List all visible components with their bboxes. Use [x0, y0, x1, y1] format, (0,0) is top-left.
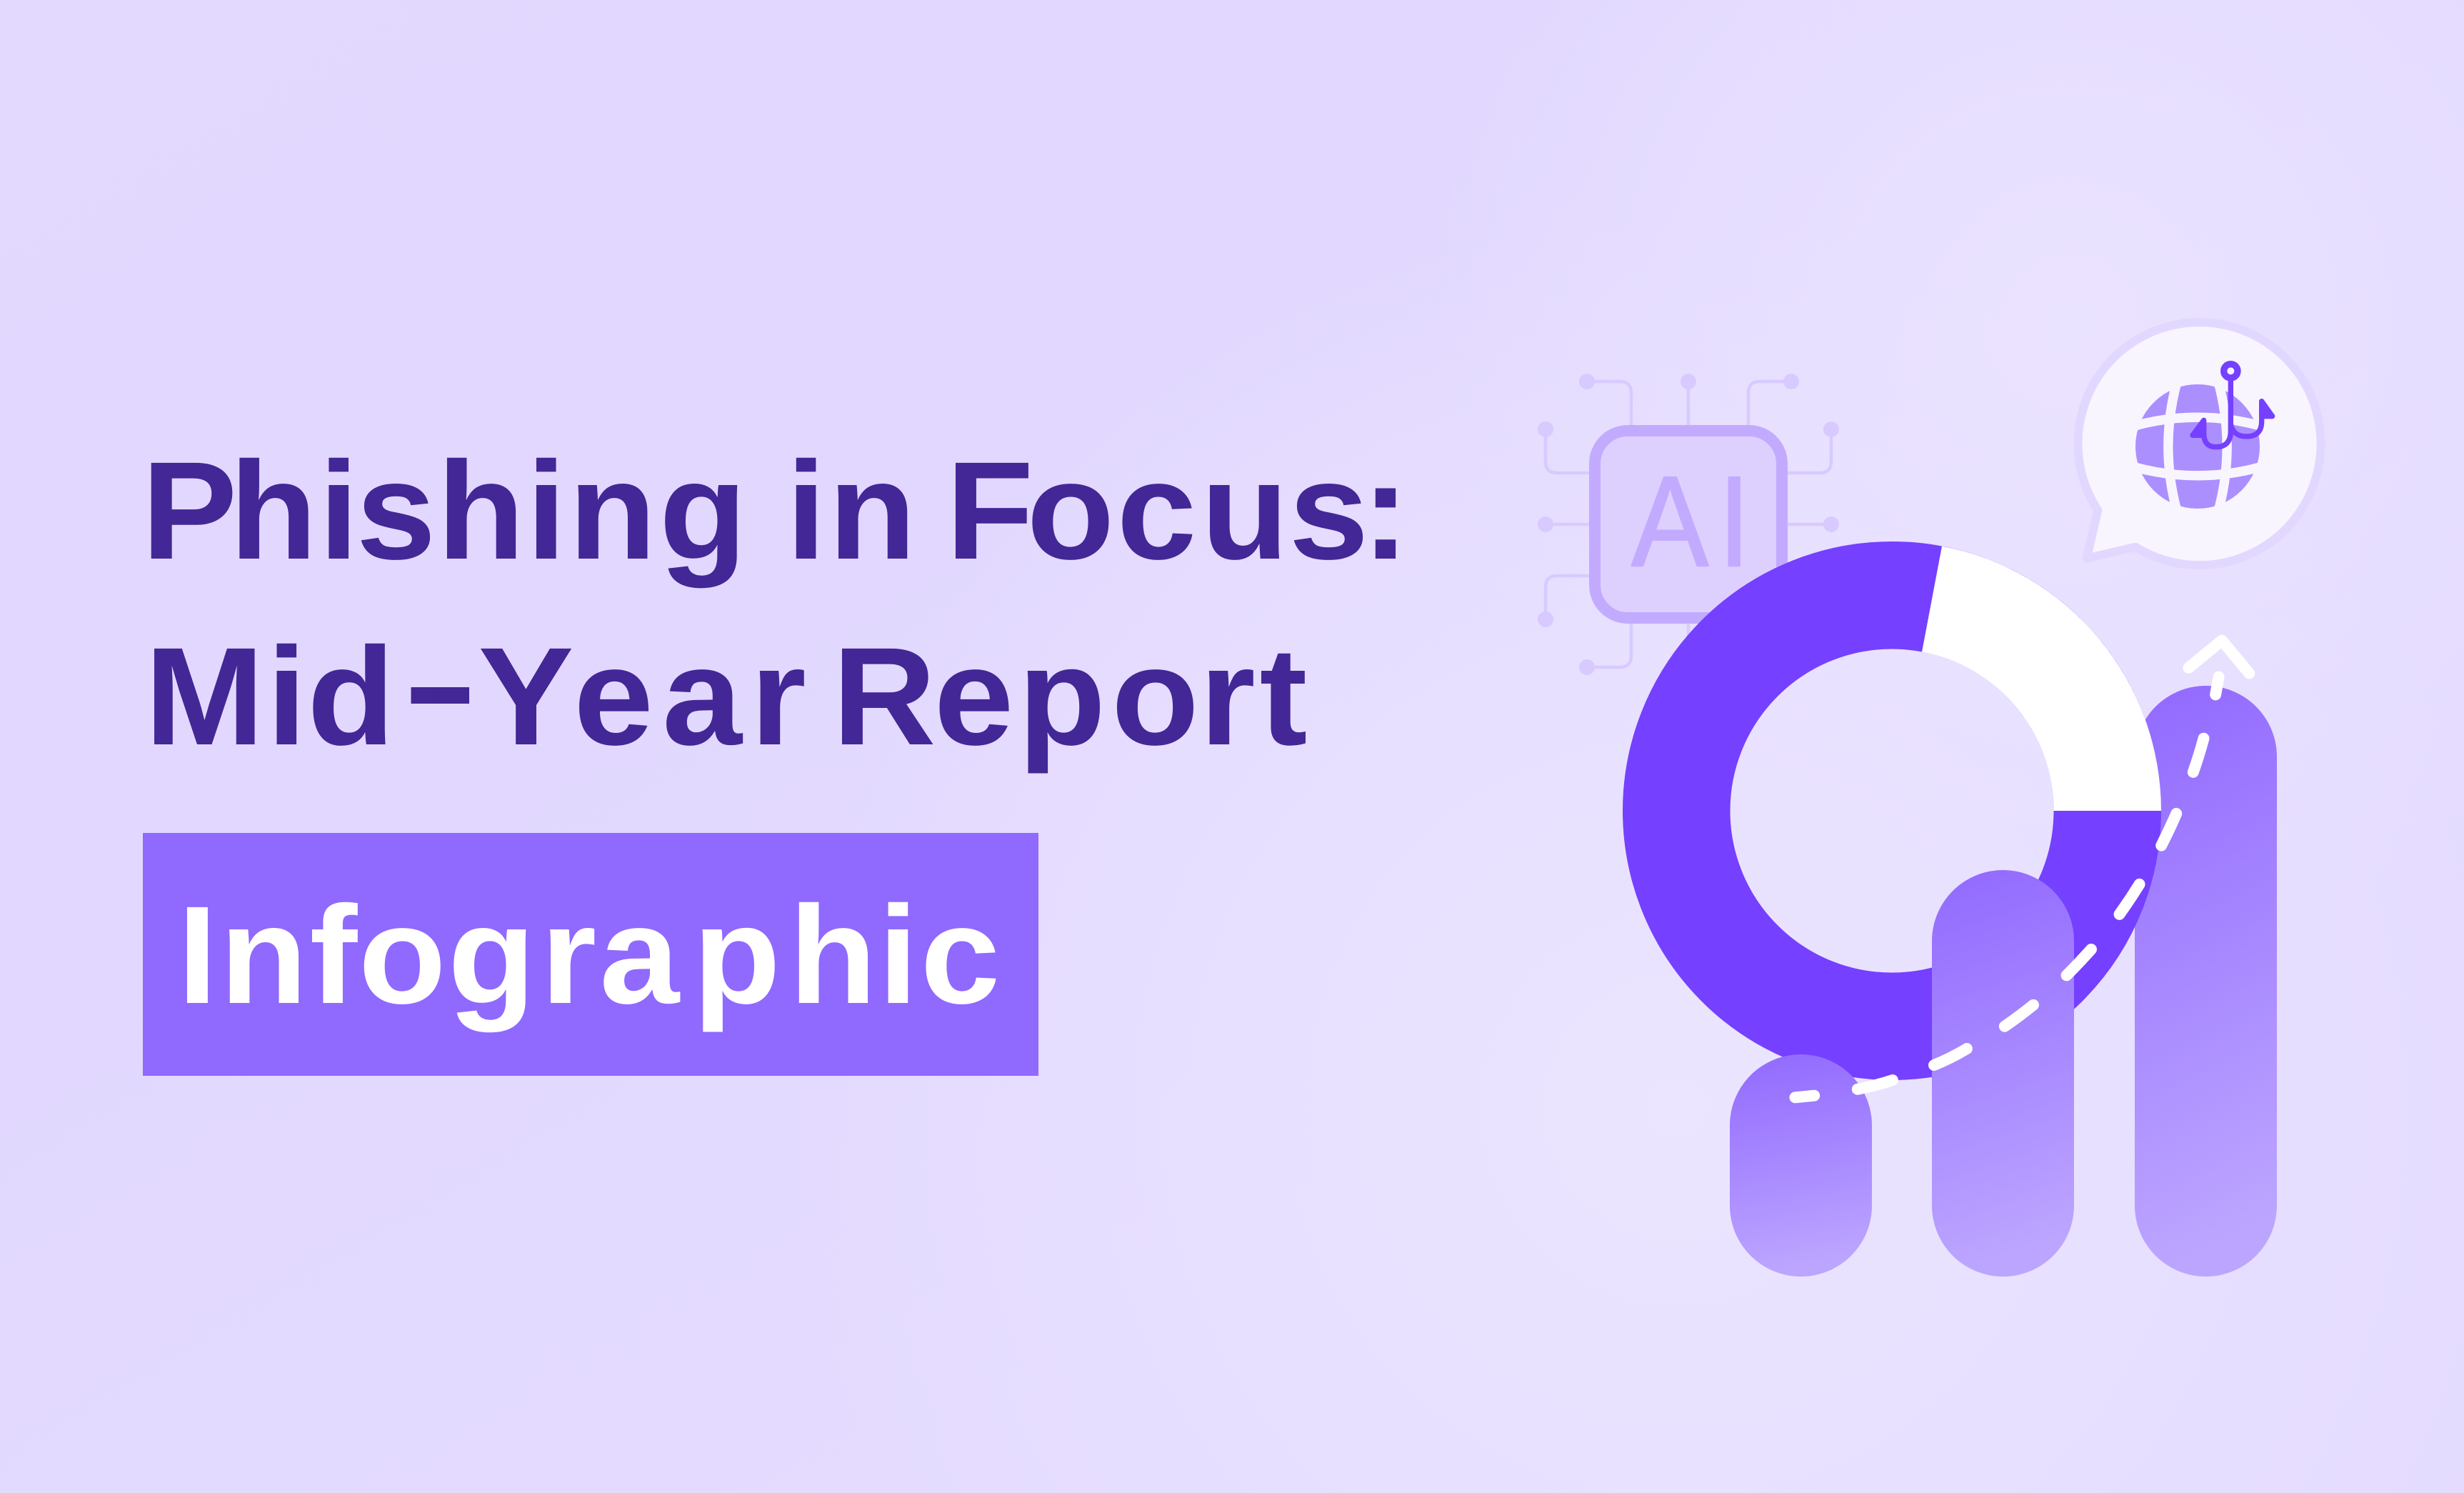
title: hyphen bar	[411, 687, 469, 704]
badge: Infographic	[143, 833, 1038, 1076]
donut: white segment	[1922, 546, 2161, 811]
chip circuit nodes	[1538, 374, 1839, 675]
donut: purple segment	[1676, 595, 2108, 1027]
globe	[2133, 381, 2262, 512]
chip circuit traces	[1546, 381, 1831, 667]
chip label: AI	[1631, 450, 1751, 594]
bubble	[2078, 322, 2321, 565]
bar chart: medium bar	[1932, 870, 2074, 1277]
icon: AI chip	[1538, 374, 1839, 675]
donut chart	[1676, 546, 2161, 1027]
chip body	[1595, 431, 1782, 618]
bar chart: short bar	[1730, 1054, 1872, 1277]
title: Mid-Year Report: -	[428, 626, 464, 746]
bar chart: tall bar	[2135, 686, 2277, 1277]
title: Mid-Year Report: Year Report	[479, 619, 1307, 774]
icon: speech bubble with globe and hook	[2078, 322, 2321, 565]
title: Phishing in Focus: Phishing in Focus:	[141, 433, 1409, 588]
badge: Infographic: Infographic	[178, 877, 1000, 1032]
title: Mid-Year Report: Mid	[145, 619, 395, 774]
fishing hook	[2193, 364, 2273, 447]
trend line: dashed arrow	[1795, 641, 2249, 1097]
